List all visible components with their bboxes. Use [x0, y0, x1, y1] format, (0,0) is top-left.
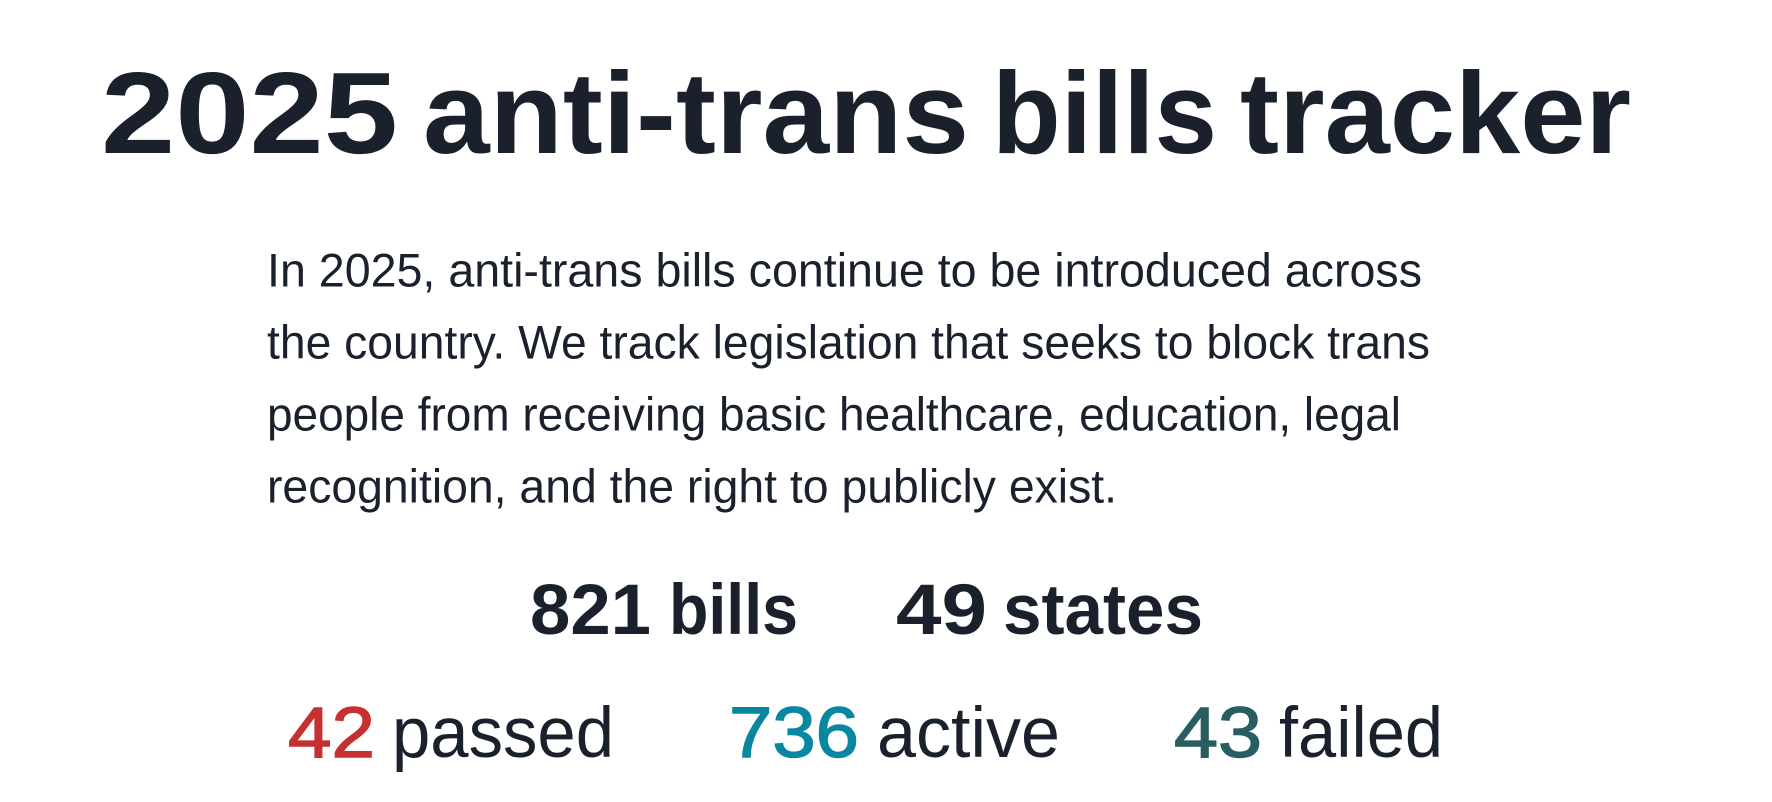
stat: states: 49 [896, 571, 987, 650]
intro paragraph [267, 244, 1430, 514]
intro paragraph: the country. We track legislation that seeks to block trans [267, 316, 1430, 370]
title: 2025 [101, 48, 398, 178]
stat: failed [1174, 694, 1443, 773]
stat: states: states [1003, 571, 1203, 650]
intro paragraph: recognition, and the right to publicly exist. [267, 460, 1117, 514]
stat: active [729, 694, 1060, 773]
stat: failed: failed [1279, 694, 1443, 773]
stat: total bills [530, 571, 798, 650]
title: bills [992, 48, 1217, 178]
stat: total bills: 821 [530, 571, 651, 650]
stat: passed [288, 694, 614, 773]
stat: total bills: bills [669, 571, 798, 650]
stat: states [896, 571, 1203, 650]
title [101, 48, 1631, 178]
intro paragraph: people from receiving basic healthcare, education, legal [267, 388, 1401, 442]
intro paragraph: In 2025, anti-trans bills continue to be introduced across [267, 244, 1422, 298]
stat: passed: passed [392, 694, 614, 773]
title: anti-trans [423, 48, 969, 178]
stat: active: active [877, 694, 1060, 773]
title: tracker [1240, 48, 1631, 178]
stat: active: 736 [729, 694, 859, 773]
stat: passed: 42 [288, 694, 375, 773]
stat: failed: 43 [1174, 694, 1262, 773]
